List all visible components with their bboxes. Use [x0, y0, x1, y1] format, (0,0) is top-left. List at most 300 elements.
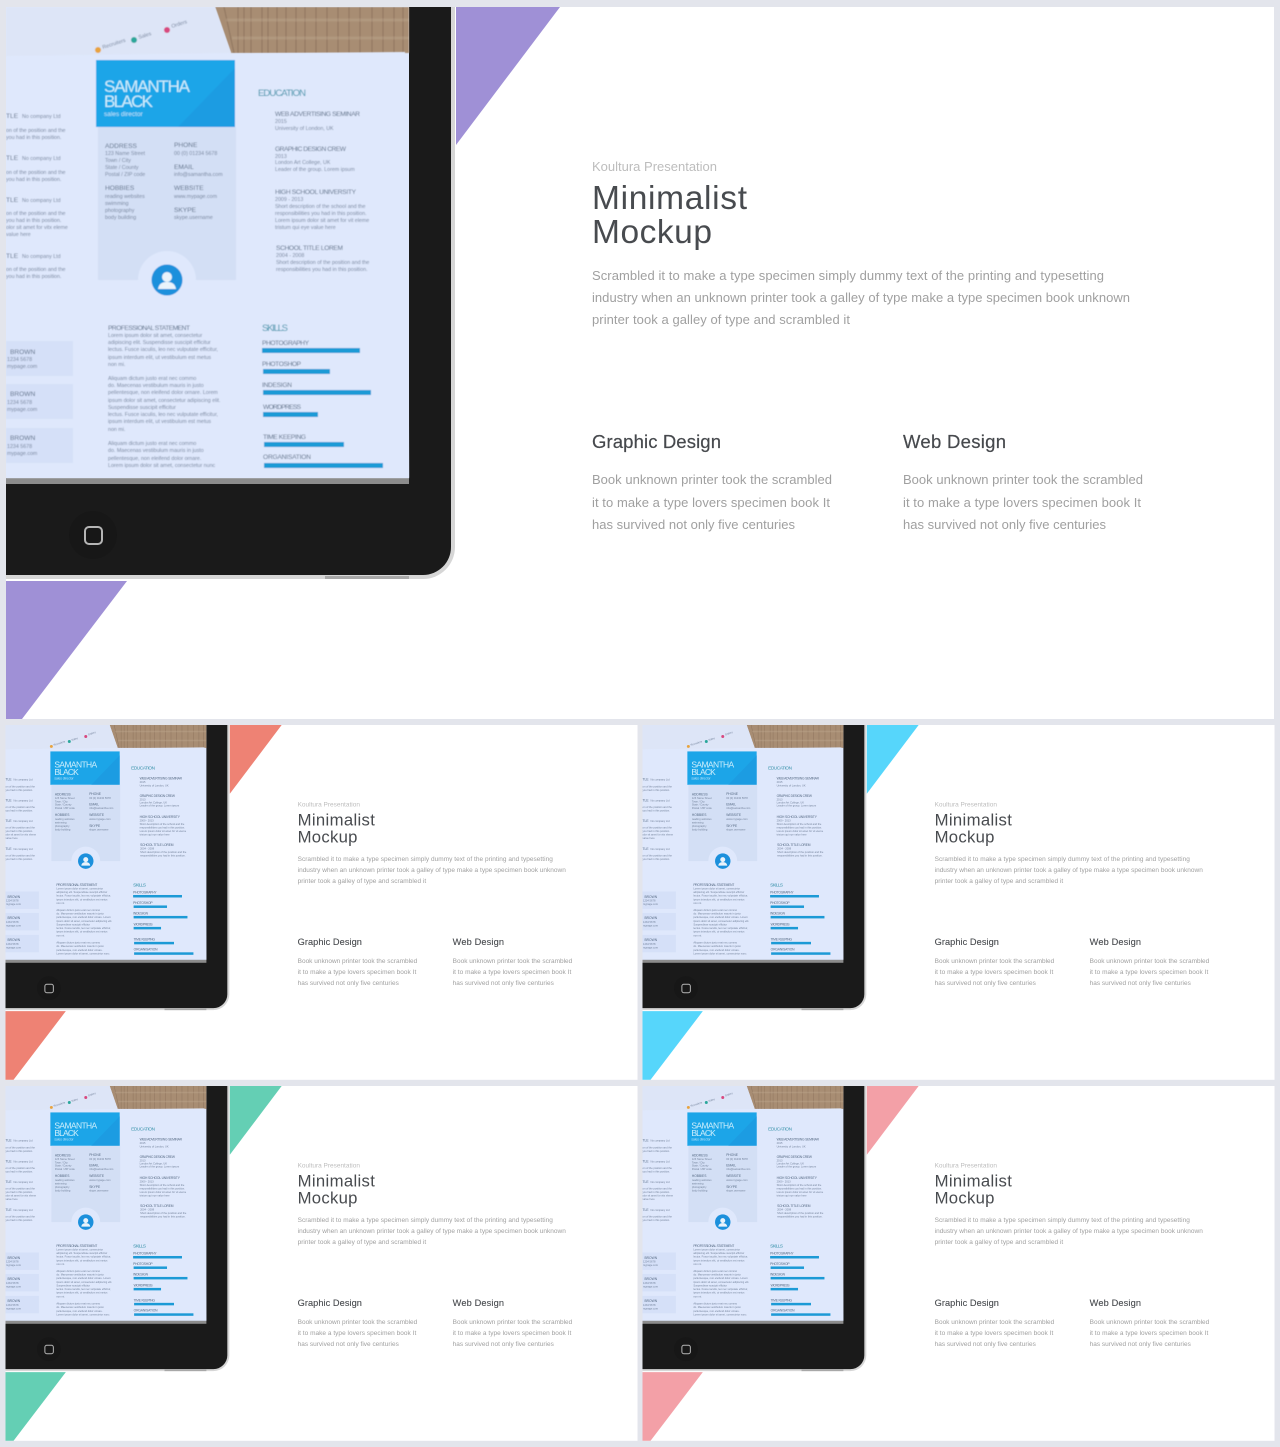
left experience column: TLE: [642, 1208, 649, 1212]
education: 2015: [777, 780, 783, 784]
column: web design: Book unknown printer took the scrambled: [453, 1319, 573, 1326]
education: [768, 1126, 824, 1219]
contact panel: skype.username: [89, 1189, 109, 1193]
education: WEB ADVERTISING SEMINAR: [140, 776, 183, 780]
resume header: sales director: [691, 776, 712, 780]
professional statement: Aliquam dictum justo erat nec commo: [56, 940, 101, 944]
contact panel: body building: [692, 1189, 708, 1193]
title: [299, 814, 375, 846]
intro paragraph: industry when an unknown printer took a galley of type make a type specimen book unknown: [935, 867, 1203, 874]
contact panel: www.mypage.com: [726, 818, 748, 821]
contact panel: WEBSITE: [726, 1174, 742, 1178]
left experience column: TLE: [642, 798, 649, 802]
contact panel: www.mypage.com: [726, 1179, 748, 1182]
contact panel: body building: [692, 828, 708, 832]
education: responsibilities you had in this position.: [777, 1187, 822, 1191]
resume header: sales director: [54, 776, 75, 780]
education: [131, 765, 187, 858]
contact panel: State / County: [692, 803, 709, 807]
legend dots: Orders: [87, 1091, 97, 1097]
reference cards: mypage.com: [6, 903, 22, 906]
reference cards: 1234 5678: [643, 1259, 656, 1263]
contact panel: info@samantha.com: [174, 172, 223, 178]
professional statement: Suspendisse suscipit efficitur: [108, 405, 176, 411]
resume header: SAMANTHA: [691, 1120, 735, 1130]
professional statement: non mi.: [693, 901, 702, 905]
education: tristum qui eye value here: [140, 833, 170, 837]
legend dots: Orders: [724, 1091, 734, 1097]
left experience column: TLE: [6, 1138, 12, 1142]
column: web design: Book unknown printer took the scrambled: [1090, 958, 1210, 965]
education: tristum qui eye value here: [275, 225, 336, 231]
column: web design: Web Design: [453, 1298, 504, 1308]
professional statement: lectus. Fusce iaculis, leo nec vulputate efficitur,: [693, 1254, 748, 1258]
education: 2004 - 2008: [276, 253, 304, 259]
education: 2009 - 2013: [140, 819, 154, 823]
contact panel: skype.username: [174, 215, 213, 221]
professional statement: Aliquam dictum justo erat nec commo: [693, 1269, 738, 1273]
left experience column: you had in this position.: [6, 177, 61, 183]
left experience column: TLE: [642, 1180, 649, 1184]
resume header: sales director: [104, 111, 143, 118]
title: Mockup: [935, 1189, 994, 1208]
professional statement: adipiscing elit. Suspendisse suscipit efficitur: [693, 1251, 744, 1255]
left experience column: No company Ltd: [13, 819, 33, 823]
professional statement: Aliquam dictum justo erat nec commo: [56, 1301, 101, 1305]
education: 2013: [777, 797, 783, 801]
left experience column: TLE: [6, 1180, 12, 1184]
triangle: bottom accent: [6, 581, 127, 719]
contact panel: SKYPE: [89, 824, 101, 828]
reference cards: BROWN: [10, 349, 36, 356]
left experience column: you had in this position.: [642, 1190, 670, 1194]
professional statement: adipiscing elit. Suspendisse suscipit efficitur: [108, 340, 211, 346]
triangle: top accent: [867, 725, 919, 794]
contact panel: skype.username: [726, 828, 746, 832]
contact panel: ADDRESS: [692, 792, 709, 796]
column: web design: it to make a type lovers specimen book It: [903, 495, 1141, 510]
left experience column: TLE: [6, 819, 12, 823]
title: Mockup: [592, 214, 712, 251]
professional statement: Suspendisse suscipit efficitur: [56, 922, 90, 926]
professional statement: lectus. Fusce iaculis, leo nec vulputate efficitur,: [56, 1254, 111, 1258]
skills bars: PHOTOSHOP: [770, 901, 790, 905]
left experience column: No company Ltd: [13, 1138, 33, 1142]
reference cards: 1234 5678: [643, 898, 656, 902]
resume sheet: [6, 1086, 206, 1321]
column: web design: it to make a type lovers specimen book It: [453, 1330, 571, 1337]
left experience column: olor sit amet for vitx eleme: [642, 833, 674, 837]
skills bars: PHOTOSHOP: [133, 1262, 153, 1266]
professional statement: ipsum interdum elit, ut vestibulum est metus: [56, 929, 108, 933]
column: graphic design: Book unknown printer took the scrambled: [935, 958, 1055, 965]
education: 2013: [275, 154, 287, 160]
left experience column: on of the position and the: [6, 1166, 36, 1170]
left experience column: on of the position and the: [6, 805, 36, 809]
professional statement: pellentesque, non eleifend dolor ornare. Lorem: [693, 1276, 749, 1280]
column: web design: [453, 1298, 573, 1348]
column: web design: Book unknown printer took the scrambled: [903, 472, 1143, 487]
contact panel: [51, 785, 120, 861]
professional statement: lectus. Fusce iaculis, leo nec vulputate efficitur,: [693, 1287, 748, 1291]
left experience column: on of the position and the: [642, 805, 673, 809]
professional statement: Lorem ipsum dolor sit amet, consectetur: [693, 1248, 740, 1252]
professional statement: pellentesque, non eleifend dolor ornare.: [56, 1309, 103, 1313]
professional statement: PROFESSIONAL STATEMENT: [56, 1244, 97, 1248]
left experience column: No company Ltd: [650, 847, 670, 851]
education: 2015: [140, 780, 146, 784]
title: Mockup: [298, 1189, 357, 1208]
education: responsibilities you had in this position.: [140, 826, 185, 830]
education: Short description of the school and the: [140, 1183, 185, 1187]
legend dots: Sales: [71, 736, 79, 742]
column: web design: Web Design: [453, 937, 504, 947]
column: graphic design: Book unknown printer took the scrambled: [298, 958, 418, 965]
contact panel: 00 (0) 01234 5678: [89, 796, 111, 800]
column: graphic design: Graphic Design: [935, 1298, 999, 1308]
left experience column: on of the position and the: [6, 170, 66, 176]
professional statement: PROFESSIONAL STATEMENT: [693, 883, 734, 887]
education: Short description of the position and the: [140, 850, 187, 854]
reference cards: 1234 5678: [643, 1281, 656, 1285]
contact panel: State / County: [55, 803, 72, 807]
left experience column: you had in this position.: [642, 829, 670, 833]
education: WEB ADVERTISING SEMINAR: [275, 111, 360, 118]
professional statement: PROFESSIONAL STATEMENT: [108, 325, 190, 332]
intro paragraph: printer took a galley of type and scrambled it: [298, 1239, 426, 1246]
intro paragraph: [935, 856, 1203, 885]
intro paragraph: industry when an unknown printer took a galley of type make a type specimen book unknown: [592, 290, 1130, 305]
education: GRAPHIC DESIGN CREW: [140, 1155, 176, 1159]
education: responsibilities you had in this position.: [777, 854, 823, 858]
resume header: SAMANTHA: [54, 1120, 98, 1130]
legend dots: Recruiters: [690, 1100, 703, 1108]
legend dots: Sales: [71, 1097, 79, 1103]
reference cards: [6, 891, 39, 952]
slide: purple (large): [6, 7, 1274, 719]
education: London Art College, UK: [140, 800, 167, 804]
resume header: BLACK: [691, 1128, 716, 1138]
column: web design: [903, 431, 1143, 532]
triangle: bottom accent: [642, 1011, 703, 1080]
left experience column: TLE: [642, 1159, 649, 1163]
contact panel: 123 Name Street: [55, 796, 75, 800]
contact panel: reading websites: [692, 1178, 712, 1182]
contact panel: Town / City: [692, 1160, 705, 1164]
column: web design: has survived not only five centuries: [453, 980, 554, 987]
professional statement: Lorem ipsum dolor sit amet, consectetur nunc: [693, 951, 747, 955]
left experience column: TLE: [642, 819, 649, 823]
contact panel: body building: [105, 215, 136, 221]
skills bars: WORDPRESS: [134, 1283, 153, 1287]
title: Minimalist: [298, 1172, 375, 1191]
column: graphic design: Graphic Design: [935, 937, 999, 947]
education: GRAPHIC DESIGN CREW: [275, 146, 347, 153]
education: WEB ADVERTISING SEMINAR: [140, 1137, 183, 1141]
left experience column: No company Ltd: [22, 114, 61, 120]
professional statement: pellentesque, non eleifend dolor ornare. Lorem: [693, 915, 749, 919]
education: SCHOOL TITLE LOREM: [140, 1204, 174, 1208]
skills bars: ORGANISATION: [771, 947, 795, 951]
education: WEB ADVERTISING SEMINAR: [777, 776, 820, 780]
skills bars: WORDPRESS: [771, 922, 790, 926]
education: Leader of the group. Lorem ipsum: [275, 167, 355, 173]
intro paragraph: Scrambled it to make a type specimen simply dummy text of the printing and typesetting: [298, 1217, 553, 1224]
education: University of London, UK: [140, 783, 169, 787]
professional statement: PROFESSIONAL STATEMENT: [693, 1244, 734, 1248]
resume header: SAMANTHA: [54, 759, 98, 769]
left experience column: olor sit amet for vitx eleme: [6, 1194, 37, 1198]
contact panel: body building: [55, 1189, 71, 1193]
column: web design: Book unknown printer took the scrambled: [453, 958, 573, 965]
left experience column: value here: [6, 232, 31, 238]
education: tristum qui eye value here: [777, 833, 807, 837]
professional statement: pellentesque, non eleifend dolor ornare.: [108, 456, 201, 462]
left experience column: No company Ltd: [650, 1159, 670, 1163]
reference cards: BROWN: [7, 895, 21, 899]
title: Minimalist: [935, 1172, 1012, 1191]
professional statement: pellentesque, non eleifend dolor ornare.: [693, 948, 740, 952]
reference cards: 1234 5678: [6, 898, 19, 902]
reference cards: mypage.com: [643, 903, 659, 906]
reference cards: mypage.com: [7, 451, 38, 457]
education: Short description of the school and the: [777, 822, 822, 826]
title: [594, 185, 747, 250]
professional statement: Lorem ipsum dolor sit amet, consectetur nunc: [56, 1312, 110, 1316]
left experience column: No company Ltd: [13, 1208, 33, 1212]
education: 2004 - 2008: [140, 847, 155, 851]
left experience column: TLE: [6, 777, 12, 781]
professional statement: Aliquam dictum justo erat nec commo: [56, 908, 101, 912]
legend dots: [50, 730, 97, 748]
left experience column: you had in this position.: [642, 1170, 670, 1174]
skills bars: PHOTOGRAPHY: [133, 890, 157, 894]
resume sheet: [642, 1086, 843, 1321]
icon: home button: [37, 1337, 61, 1361]
intro paragraph: [935, 1217, 1203, 1246]
reference cards: 1234 5678: [6, 942, 19, 946]
column: web design: [1090, 937, 1210, 987]
left experience column: you had in this position.: [642, 857, 670, 861]
reference cards: [642, 1252, 676, 1313]
skills bars: INDESIGN: [133, 1272, 149, 1276]
skills bars: ORGANISATION: [134, 947, 158, 951]
intro paragraph: [298, 856, 566, 885]
column: web design: it to make a type lovers specimen book It: [1090, 969, 1208, 976]
contact panel: Town / City: [55, 799, 68, 803]
professional statement: pellentesque, non eleifend dolor ornare.: [693, 1309, 740, 1313]
left experience column: No company Ltd: [22, 156, 61, 162]
left experience column: you had in this position.: [6, 788, 33, 792]
left experience column: No company Ltd: [650, 1208, 670, 1212]
left experience column: on of the position and the: [6, 1145, 36, 1149]
reference cards: 1234 5678: [6, 920, 19, 924]
left experience column: No company Ltd: [650, 1138, 670, 1142]
column: graphic design: Graphic Design: [298, 937, 362, 947]
title: [935, 1172, 1012, 1208]
professional statement: non mi.: [56, 1294, 65, 1298]
icon: profile: [708, 847, 737, 876]
contact panel: WEBSITE: [174, 185, 204, 192]
skills bars: SKILLS: [262, 323, 288, 334]
contact panel: 00 (0) 01234 5678: [726, 1157, 748, 1161]
contact panel: WEBSITE: [726, 813, 742, 817]
intro paragraph: Scrambled it to make a type specimen simply dummy text of the printing and typesetting: [298, 856, 553, 863]
left experience column: TLE: [6, 155, 19, 162]
column: web design: has survived not only five centuries: [453, 1341, 554, 1348]
tablet mockup: [642, 1086, 866, 1371]
professional statement: ipsum interdum elit, ut vestibulum est metus: [56, 1290, 108, 1294]
contact panel: HOBBIES: [105, 185, 135, 192]
professional statement: Suspendisse suscipit efficitur: [693, 1283, 727, 1287]
education: 2009 - 2013: [777, 1180, 791, 1184]
professional statement: Aliquam dictum justo erat nec commo: [693, 940, 738, 944]
education: responsibilities you had in this position.: [276, 267, 368, 273]
education: [258, 88, 369, 273]
column: graphic design: has survived not only five centuries: [935, 1341, 1036, 1348]
education: London Art College, UK: [777, 1161, 804, 1165]
education: Short description of the school and the: [140, 822, 185, 826]
column: graphic design: Book unknown printer took the scrambled: [298, 1319, 418, 1326]
icon: home button: [674, 976, 698, 1000]
education: HIGH SCHOOL UNIVERSITY: [140, 1176, 181, 1180]
professional statement: do. Maecenas vestibulum mauris in justo: [56, 1272, 104, 1276]
professional statement: lectus. Fusce iaculis, leo nec vulputate efficitur,: [56, 926, 111, 930]
contact panel: info@samantha.com: [726, 806, 751, 810]
contact panel: HOBBIES: [55, 1174, 70, 1178]
skills bars: [133, 1244, 193, 1316]
slide: salmon: [6, 725, 638, 1080]
skills bars: PHOTOGRAPHY: [262, 340, 310, 347]
resume header: BLACK: [691, 767, 716, 777]
contact panel: HOBBIES: [55, 813, 70, 817]
left experience column: value here: [642, 836, 655, 840]
column: graphic design: it to make a type lovers specimen book It: [298, 969, 416, 976]
icon: profile: [138, 252, 196, 296]
reference cards: mypage.com: [643, 924, 659, 927]
contact panel: 123 Name Street: [692, 1157, 712, 1161]
professional statement: ipsum interdum elit, ut vestibulum est metus: [108, 355, 211, 361]
column: graphic design: has survived not only five centuries: [592, 517, 796, 532]
skills bars: TIME KEEPING: [134, 1298, 155, 1302]
title: Minimalist: [298, 811, 375, 830]
intro paragraph: [298, 1217, 566, 1246]
reference cards: mypage.com: [6, 1285, 22, 1288]
left experience column: olor sit amet for vitx eleme: [6, 225, 68, 231]
contact panel: photography: [692, 1185, 707, 1189]
reference cards: 1234 5678: [7, 444, 32, 450]
contact panel: info@samantha.com: [726, 1167, 751, 1171]
contact panel: 00 (0) 01234 5678: [89, 1157, 111, 1161]
professional statement: adipiscing elit. Suspendisse suscipit efficitur: [56, 1251, 107, 1255]
reference cards: mypage.com: [643, 946, 659, 949]
education: Short description of the school and the: [777, 1183, 822, 1187]
left experience column: on of the position and the: [642, 1187, 673, 1191]
education: responsibilities you had in this position.: [777, 826, 822, 830]
contact panel: photography: [105, 208, 135, 214]
skills bars: INDESIGN: [133, 911, 149, 915]
left experience column: TLE: [642, 1138, 649, 1142]
resume header: [50, 751, 120, 785]
skills bars: WORDPRESS: [771, 1283, 790, 1287]
left experience column: No company Ltd: [13, 1159, 33, 1163]
professional statement: Lorem ipsum dolor sit amet, consectetur: [108, 333, 202, 339]
left experience column: [642, 1138, 674, 1222]
reference cards: mypage.com: [6, 1307, 22, 1310]
column: web design: [1090, 1298, 1210, 1348]
skills bars: [770, 883, 830, 955]
contact panel: ADDRESS: [105, 143, 137, 150]
education: Lorem ipsum dolor sit amet for vit eleme: [777, 829, 824, 833]
professional statement: do. Maecenas vestibulum mauris in justo: [693, 1272, 741, 1276]
professional statement: do. Maecenas vestibulum mauris in justo: [56, 1305, 104, 1309]
intro paragraph: industry when an unknown printer took a galley of type make a type specimen book unknown: [298, 1228, 566, 1235]
education: Lorem ipsum dolor sit amet for vit eleme: [140, 1190, 187, 1194]
column: web design: [453, 937, 573, 987]
contact panel: HOBBIES: [692, 1174, 707, 1178]
left experience column: value here: [642, 1197, 655, 1201]
resume sheet: [6, 725, 206, 960]
education: [768, 765, 824, 858]
resume sheet: [642, 725, 843, 960]
contact panel: reading websites: [55, 1178, 75, 1182]
legend dots: Orders: [87, 730, 97, 736]
professional statement: Lorem ipsum dolor sit amet, consectetur nunc: [693, 1312, 747, 1316]
contact panel: SKYPE: [174, 207, 197, 214]
education: Short description of the position and the: [777, 1211, 824, 1215]
resume header: SAMANTHA: [691, 759, 735, 769]
education: GRAPHIC DESIGN CREW: [777, 1155, 813, 1159]
reference cards: [6, 341, 73, 463]
column: graphic design: it to make a type lovers specimen book It: [935, 969, 1053, 976]
column: web design: Web Design: [1090, 1298, 1141, 1308]
contact panel: photography: [692, 824, 707, 828]
left experience column: you had in this position.: [6, 1170, 33, 1174]
contact panel: EMAIL: [726, 803, 736, 807]
resume header: [687, 1112, 757, 1146]
left experience column: TLE: [6, 253, 19, 260]
skills bars: PHOTOGRAPHY: [133, 1251, 157, 1255]
contact panel: EMAIL: [89, 1164, 99, 1168]
left experience column: you had in this position.: [6, 1149, 33, 1153]
left experience column: you had in this position.: [6, 829, 33, 833]
contact panel: Postal / ZIP code: [55, 806, 75, 810]
intro paragraph: printer took a galley of type and scrambled it: [298, 878, 426, 885]
education: Leader of the group. Lorem ipsum: [140, 1165, 180, 1169]
education: 2013: [140, 797, 146, 801]
column: graphic design: it to make a type lovers specimen book It: [298, 1330, 416, 1337]
resume header: BLACK: [104, 92, 154, 111]
professional statement: Aliquam dictum justo erat nec commo: [108, 376, 196, 382]
column: web design: it to make a type lovers specimen book It: [453, 969, 571, 976]
contact panel: Town / City: [55, 1160, 68, 1164]
intro paragraph: industry when an unknown printer took a galley of type make a type specimen book unknown: [298, 867, 566, 874]
left experience column: No company Ltd: [13, 847, 33, 851]
reference cards: BROWN: [644, 1277, 658, 1281]
education: responsibilities you had in this position.: [140, 1187, 185, 1191]
contact panel: EMAIL: [89, 803, 99, 807]
education: WEB ADVERTISING SEMINAR: [777, 1137, 820, 1141]
contact panel: Postal / ZIP code: [55, 1167, 75, 1171]
professional statement: Aliquam dictum justo erat nec commo: [108, 441, 196, 447]
icon: home button: [84, 526, 103, 545]
legend dots: Orders: [724, 730, 734, 736]
title: Minimalist: [592, 180, 748, 217]
skills bars: WORDPRESS: [134, 922, 153, 926]
reference cards: BROWN: [7, 1277, 21, 1281]
professional statement: [693, 1244, 749, 1316]
eyebrow: Koultura Presentation: [298, 802, 360, 809]
